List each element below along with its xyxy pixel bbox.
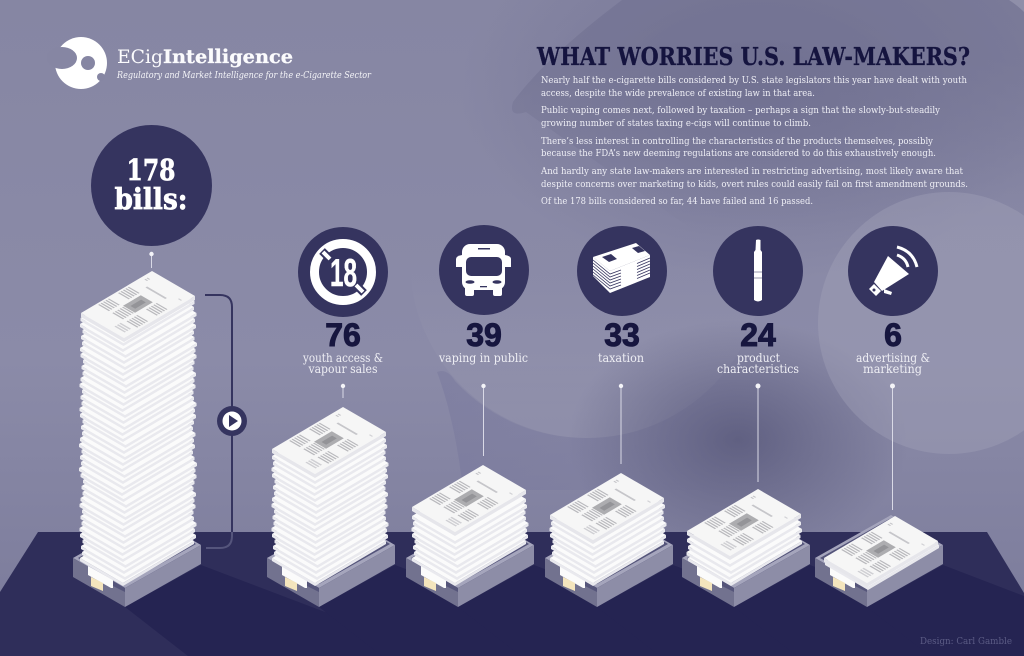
stat: 76 youth access: vapour sales (308, 362, 378, 376)
stat: 76 youth access: youth access & (302, 351, 383, 365)
paper stack: 24 (682, 489, 810, 607)
stat: 24 product characteristics (717, 317, 799, 376)
intro text block (540, 75, 968, 207)
intro text block: access, despite the wide prevalence of existing law in that area. (541, 88, 815, 99)
icon: banknotes (577, 226, 667, 316)
intro text block: because the FDA’s new deeming regulations are considered to do this exhaustively enough. (541, 148, 936, 159)
intro text block: Public vaping comes next, followed by taxation – perhaps a sign that the slowly-but-steadily (541, 105, 941, 116)
logo: Regulatory and Market Intelligence for the e-Cigarette Sector (116, 71, 372, 81)
icon: under 18 (298, 227, 388, 317)
paper stack: 76 (267, 407, 395, 607)
stat: 24 product characteristics: 24 (740, 317, 776, 353)
total badge: 178 bills: bills: (114, 182, 188, 216)
stat: 6 advertising (856, 317, 930, 376)
stat: 6 advertising: advertising & (856, 351, 930, 365)
paper stack: 39 (406, 465, 534, 607)
logo: Intelligence (163, 46, 293, 68)
stat: 39 vaping in public: 39 (466, 317, 502, 353)
intro text block: There’s less interest in controlling the characteristics of the products themselves, possibly (541, 136, 934, 147)
credit: Design: Carl Gamble (920, 636, 1012, 647)
icon: e-cigarette (713, 226, 803, 316)
stat: 76 youth access: 76 (325, 317, 361, 353)
total badge: 178 bills (91, 125, 212, 246)
paper stack: 178 (73, 271, 201, 607)
stat: 6 advertising: marketing (863, 362, 922, 376)
intro text block: And hardly any state law-makers are interested in restricting advertising, most likely aware that (540, 166, 963, 177)
total badge: 178 bills: 178 (126, 153, 176, 187)
icon: bus (439, 225, 529, 315)
intro text block: Nearly half the e-cigarette bills considered by U.S. state legislators this year have dealt with youth (541, 75, 967, 86)
icon: under 18: 18 (330, 252, 357, 295)
bracket arrow (205, 295, 247, 548)
stat: 24 product characteristics: characteristics (717, 362, 799, 376)
stat: 76 youth access (302, 317, 383, 376)
logo: ECig (117, 46, 163, 68)
paper stack: 33 (545, 473, 673, 607)
stat: 6 advertising: 6 (884, 317, 902, 353)
intro text block: despite concerns over marketing to kids, overt rules could easily fail on first amendment grounds. (541, 179, 968, 190)
stat: 39 vaping in public: vaping in public (438, 351, 528, 365)
stat: 33 taxation (598, 317, 644, 365)
stat: 24 product characteristics: product (737, 351, 780, 365)
floor (0, 532, 1024, 656)
leader lines (149, 252, 895, 510)
icon: megaphone (848, 226, 938, 316)
stat: 33 taxation: taxation (598, 351, 644, 365)
title: WHAT WORRIES U.S. LAW-MAKERS? (536, 42, 970, 71)
logo (47, 37, 372, 89)
intro text block: Of the 178 bills considered so far, 44 have failed and 16 passed. (541, 196, 813, 207)
paper stack: 6 (815, 515, 943, 607)
intro text block: growing number of states taxing e-cigs will continue to climb. (541, 118, 811, 129)
stat: 33 taxation: 33 (604, 317, 640, 353)
stat: 39 vaping in public (438, 317, 528, 365)
